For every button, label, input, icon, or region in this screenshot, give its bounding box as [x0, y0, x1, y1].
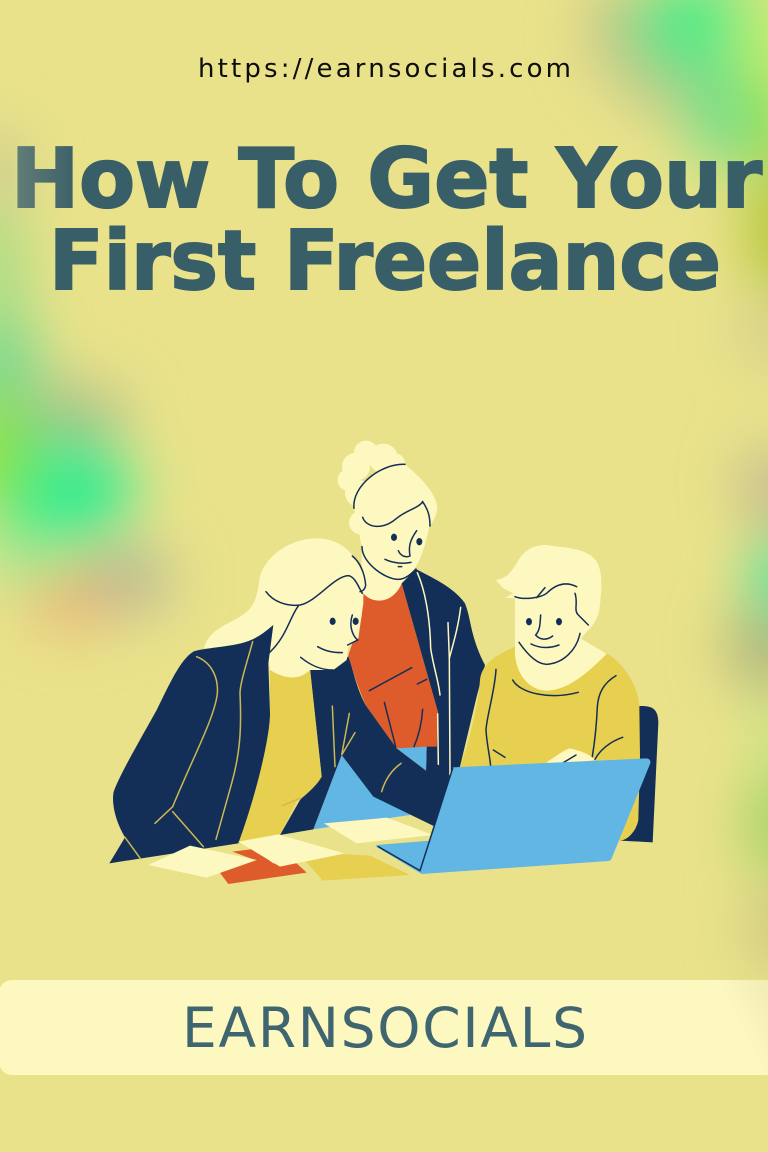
- person: middle woman: [338, 441, 485, 778]
- brand banner: [0, 980, 768, 1075]
- person: left woman in navy jacket: [109, 538, 452, 863]
- title: How To Get Your: [11, 132, 763, 227]
- person: man in yellow sweater: [460, 545, 640, 841]
- brand name: EARNSOCIALS: [182, 996, 587, 1060]
- url text: https://earnsocials.com: [198, 54, 571, 84]
- title: First Freelance: [49, 214, 721, 309]
- illustration: three people at a laptop: [109, 441, 658, 884]
- chair: [620, 706, 658, 842]
- papers on the table: [148, 818, 433, 884]
- title: [11, 132, 763, 309]
- laptop: [376, 758, 650, 874]
